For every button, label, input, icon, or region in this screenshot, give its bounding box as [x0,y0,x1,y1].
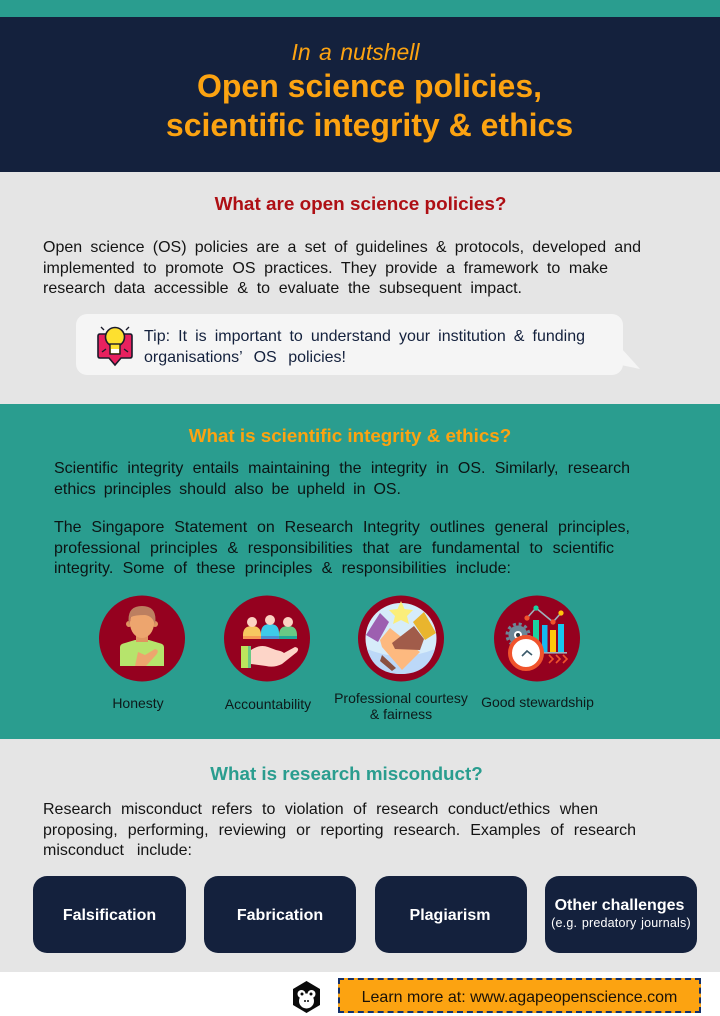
label: honesty: Honesty [112,695,164,711]
title banner [0,17,720,172]
heading: research misconduct: What is research misconduct? [210,763,483,784]
text block: misconduct definition [43,801,636,859]
tip text [144,328,585,366]
text block: integrity definition: ethics principles should also be upheld in OS. [54,481,401,498]
panel: scientific integrity [0,404,720,739]
box: fabrication: Fabrication [237,907,323,924]
label: accountability: Accountability [225,696,311,712]
text block: misconduct definition: Research misconduct refers to violation of research conduct/ethics when [43,801,598,818]
tip text: Tip: It is important to understand your institution & funding [144,328,585,345]
text block: misconduct definition: misconduct include: [43,842,192,859]
title: Open science policies, [197,68,542,104]
heading: scientific integrity: What is scientific integrity & ethics? [189,425,511,446]
icon: accountability [224,596,310,682]
text block: Singapore Statement: integrity. Some of these principles & responsibilities include: [54,560,511,577]
label: professional courtesy & fairness: Professional courtesy [334,690,468,706]
text block: integrity definition: Scientific integrity entails maintaining the integrity in OS. Similarly, research [54,460,630,477]
call to action [338,978,701,1013]
subtitle: In a nutshell [291,39,420,65]
text block: open science definition [43,239,641,297]
text block: Singapore Statement: The Singapore Statement on Research Integrity outlines general principles, [54,519,630,536]
box: fabrication [204,876,356,953]
title: scientific integrity & ethics [166,107,573,143]
text block: open science definition: implemented to promote OS practices. They provide a framework to make [43,260,608,277]
label: professional courtesy & fairness [334,690,468,722]
label: good stewardship: Good stewardship [481,694,594,710]
text block: Singapore Statement [54,519,630,577]
text block: open science definition: Open science (OS) policies are a set of guidelines & protocols, developed and [43,239,641,256]
box: plagiarism [375,876,527,953]
box: falsification: Falsification [63,907,156,924]
icon: stewardship [494,596,580,682]
icon: honesty [99,596,185,682]
text block: integrity definition [54,460,630,498]
box: plagiarism: Plagiarism [410,907,490,924]
box: other challenges [545,876,697,953]
text block: misconduct definition: proposing, performing, reviewing or reporting research. Examples of research [43,822,636,839]
callout: tip [76,314,640,375]
label: professional courtesy & fairness: & fairness [370,706,432,722]
box: other challenges: Other challenges [555,897,684,914]
text block: open science definition: research data accessible & to evaluate the subsequent impact. [43,280,522,297]
title [166,68,573,143]
panel: open science policies [0,172,720,404]
speech bubble [76,314,640,375]
text block: Singapore Statement: professional principles & responsibilities that are fundamental to scientific [54,540,614,557]
heading: open science policies: What are open science policies? [215,194,506,215]
call to action: Learn more at: www.agapeopenscience.com [362,989,677,1006]
top teal band [0,0,720,17]
icon: light bulb [97,326,133,366]
icon: monkey logo [293,981,320,1013]
box: other challenges: (e.g. predatory journals) [551,916,691,930]
icon: handshake [358,596,444,682]
box: falsification [33,876,186,953]
tip text: organisations’ OS policies! [144,349,346,366]
panel: research misconduct [0,739,720,972]
